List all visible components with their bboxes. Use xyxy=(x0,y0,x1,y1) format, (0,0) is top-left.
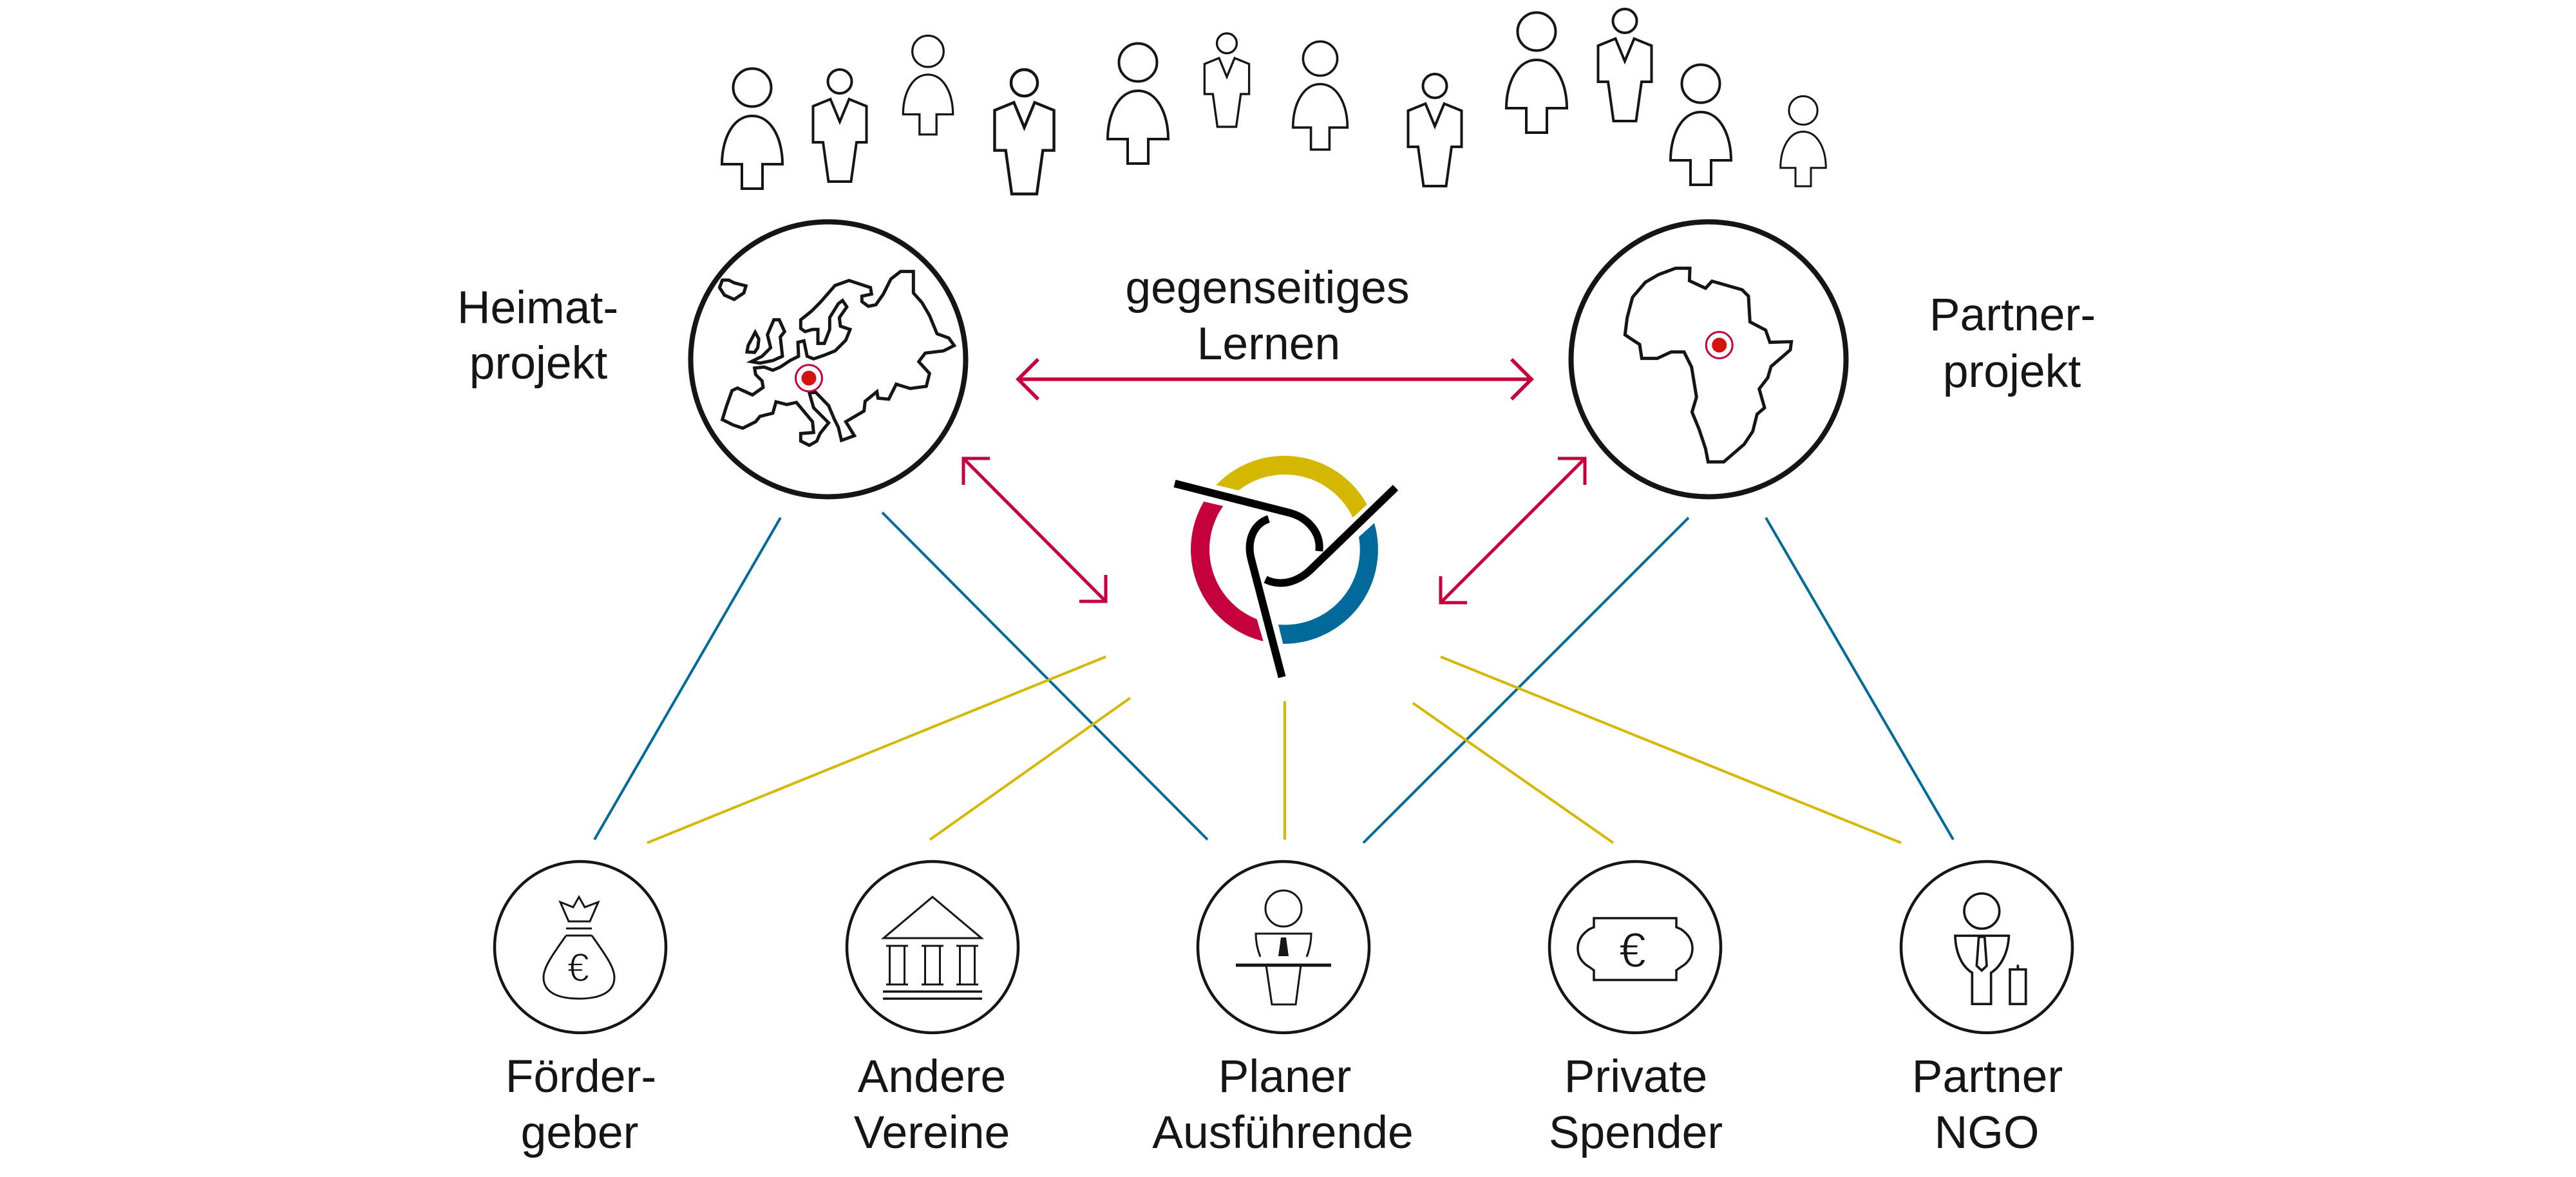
label: gegenseitiges Lernen: Lernen xyxy=(1197,318,1340,370)
label: Planer Ausführende: Planer xyxy=(1218,1051,1351,1102)
people row xyxy=(722,9,1826,194)
label: Andere Vereine: Andere xyxy=(858,1051,1006,1102)
label: Andere Vereine: Vereine xyxy=(854,1107,1010,1158)
person 10 xyxy=(1598,9,1651,121)
logo arc: red xyxy=(1191,502,1264,641)
label: Partner NGO: Partner xyxy=(1912,1051,2063,1102)
icon: bank building xyxy=(883,897,982,999)
label: Fördergeber: geber xyxy=(521,1107,638,1158)
icon: banknote: € xyxy=(1619,923,1646,978)
person 6 xyxy=(1204,33,1249,127)
label: Private Spender: Private xyxy=(1564,1051,1707,1102)
arrow: Europe to logo xyxy=(963,458,1106,601)
label: gegenseitiges Lernen: gegenseitiges xyxy=(1125,262,1410,314)
person 8 xyxy=(1408,74,1462,186)
person 5 xyxy=(1108,44,1168,164)
person 3 xyxy=(903,35,953,135)
heading: Partnerprojekt: Partner- xyxy=(1929,289,2096,341)
person 11 xyxy=(1671,64,1731,185)
heading: Partnerprojekt: projekt xyxy=(1943,346,2081,397)
panel: Europe globe xyxy=(690,221,966,497)
icon: location marker Africa xyxy=(1706,332,1732,358)
logo xyxy=(1175,456,1396,677)
icon: banknote xyxy=(1578,918,1692,980)
logo arc: blue xyxy=(1278,523,1378,644)
person 9 xyxy=(1506,13,1567,133)
label: Partner NGO: NGO xyxy=(1935,1107,2039,1158)
panel: Private Spender xyxy=(1549,862,1723,1158)
person 7 xyxy=(1293,41,1347,149)
icon: businessman with briefcase xyxy=(1955,894,2026,1004)
person 1 xyxy=(722,68,782,189)
icon: planner at desk xyxy=(1236,890,1331,1004)
person 2 xyxy=(813,70,867,182)
panel: Planer Ausführende xyxy=(1152,862,1414,1158)
connecting lines: yellow xyxy=(647,657,1901,843)
panel: Africa globe xyxy=(1571,221,1846,497)
label: Planer Ausführende: Ausführende xyxy=(1152,1107,1414,1158)
person 4 xyxy=(994,70,1054,194)
connecting lines: blue xyxy=(594,513,1953,843)
heading: Heimatprojekt: projekt xyxy=(469,337,607,389)
icon: money bag xyxy=(544,897,614,999)
panel: Partner NGO xyxy=(1901,862,2072,1158)
icon: money bag: € xyxy=(567,946,589,990)
icon: Europe map xyxy=(719,272,954,446)
panel: Andere Vereine xyxy=(847,862,1018,1158)
logo arc: yellow xyxy=(1216,456,1367,518)
label: Private Spender: Spender xyxy=(1549,1107,1723,1158)
person 12 xyxy=(1781,96,1826,186)
arrow: Africa to logo xyxy=(1441,458,1585,603)
label: Fördergeber: Förder- xyxy=(506,1051,656,1102)
icon: location marker Europe xyxy=(796,365,822,391)
panel: Fördergeber xyxy=(495,862,666,1158)
logo spiral strokes xyxy=(1175,484,1396,677)
arrow: mutual learning xyxy=(1018,359,1531,399)
heading: Heimatprojekt: Heimat- xyxy=(457,282,618,334)
icon: Africa map xyxy=(1625,268,1792,462)
